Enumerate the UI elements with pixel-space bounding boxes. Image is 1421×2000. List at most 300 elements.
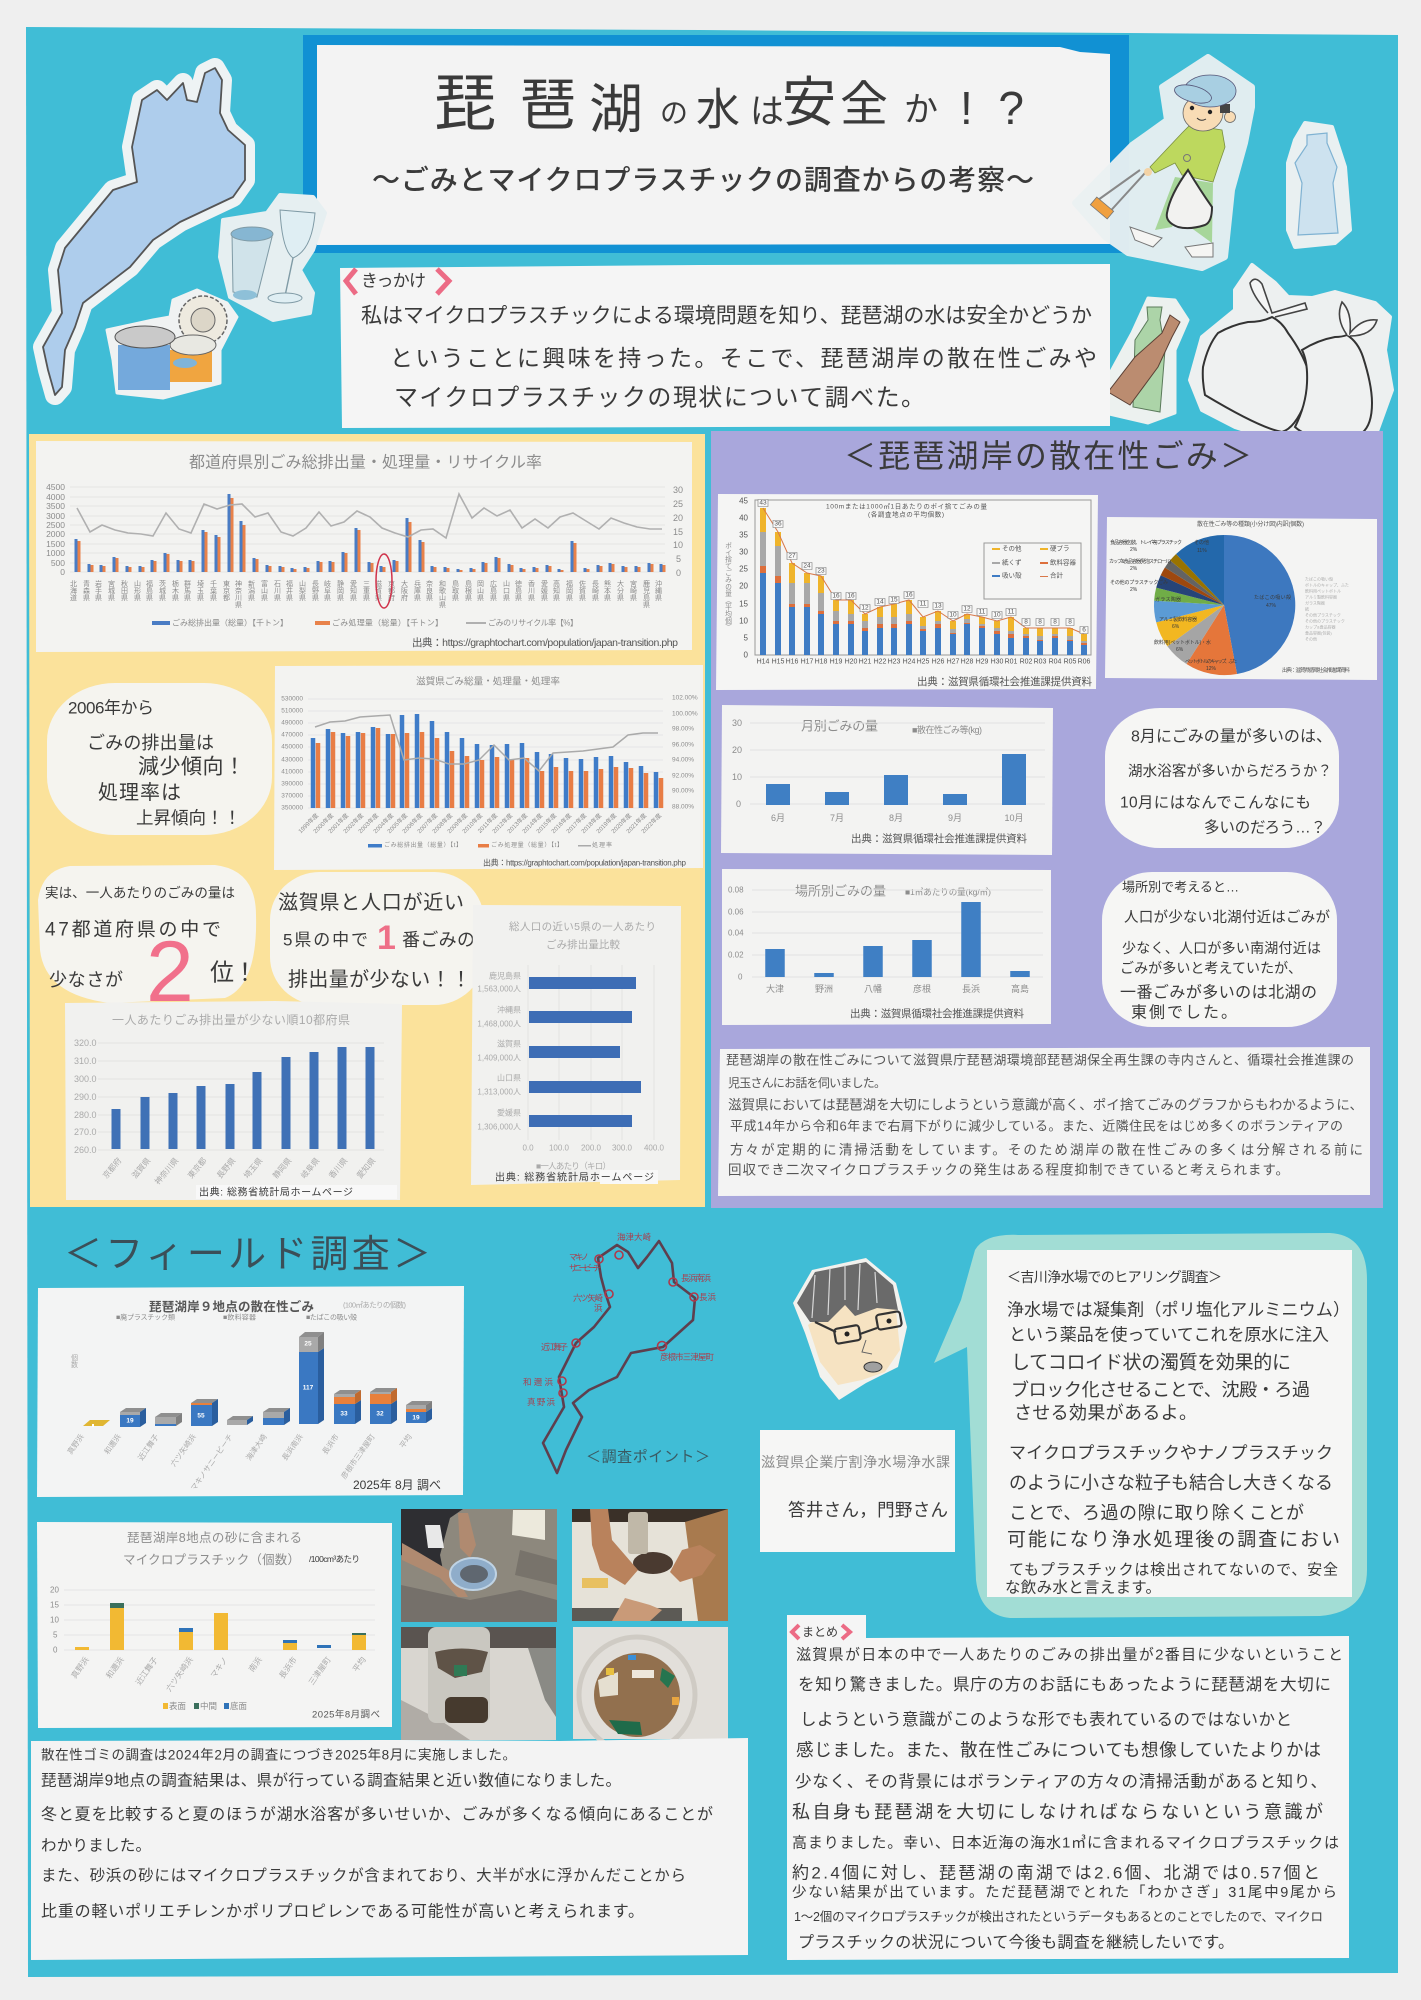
speech bubble: water plant hearing: てもプラスチックは検出されてないので、安全 bbox=[1009, 1562, 1338, 1578]
chart: litter per year stacked bars: H28 bbox=[961, 658, 974, 666]
text block: prefecture interview bbox=[718, 1047, 1370, 1196]
chart: litter per year stacked bars: H21 bbox=[859, 658, 872, 666]
chart: five prefectures of similar population: 総人口の近い5県の一人あたり bbox=[509, 920, 656, 933]
site labels: 六ツ矢崎 bbox=[573, 1293, 603, 1303]
text block: field survey results: 冬と夏を比較すると夏のほうが湖水浴客が多いせいか、ごみが多くなる傾向にあることが bbox=[41, 1806, 713, 1824]
chart: litter at nine sites: 平均 bbox=[397, 1431, 414, 1450]
illustration: person picking up litter bbox=[1075, 57, 1252, 268]
main title: !? bbox=[960, 82, 1024, 134]
chart: waste by prefecture: 茨城県 bbox=[158, 579, 166, 602]
chart: waste by prefecture: 0 bbox=[60, 567, 65, 577]
chart: waste by prefecture: 兵庫県 bbox=[414, 579, 421, 602]
chart: microplastics in sand: 南浜 bbox=[246, 1655, 264, 1674]
chart: litter by location: 大津 bbox=[766, 983, 784, 994]
chart: waste by prefecture: 熊本県 bbox=[604, 579, 611, 602]
bubble: why August and October: 10月にはなんでこんなにも bbox=[1120, 794, 1311, 812]
chart: litter by location: 彦根 bbox=[913, 983, 931, 994]
chart: litter per year stacked bars: H22 bbox=[874, 658, 887, 666]
chart: ten lowest prefectures per person: 愛知県 bbox=[354, 1155, 377, 1180]
chart: litter type pie: 2% bbox=[1130, 566, 1138, 572]
chart: litter per year stacked bars: 25 bbox=[739, 564, 749, 574]
chart: litter per year stacked bars: H14 bbox=[757, 658, 770, 666]
chart: Shiga waste totals and processing rate: 2012年度 bbox=[491, 811, 514, 835]
total value labels: 24 bbox=[803, 562, 811, 570]
chart: litter type pie: たばこの吸い殻 bbox=[1305, 576, 1333, 582]
chart: five prefectures of similar population bbox=[471, 905, 681, 1185]
chart: Shiga waste totals and processing rate: 350000 bbox=[281, 804, 303, 812]
chart: Shiga waste totals and processing rate: 2001年度 bbox=[327, 811, 350, 835]
chart: microplastics in sand: 琵琶湖岸8地点の砂に含まれる bbox=[127, 1530, 302, 1545]
chart: waste by prefecture: 2000 bbox=[46, 529, 65, 539]
speech bubble: water plant hearing: な飲み水と言えます。 bbox=[1005, 1578, 1161, 1596]
bubble: lowest of 5 similar prefectures: 滋賀県と人口が近い bbox=[278, 891, 464, 914]
chart: litter type pie: 紙 bbox=[1305, 606, 1309, 612]
bubble: thoughts by location: ごみが多いと考えていたが、 bbox=[1120, 960, 1302, 976]
chart: five prefectures of similar population: 1,306,000人 bbox=[477, 1122, 521, 1132]
chart: waste by prefecture: 福井県 bbox=[286, 579, 293, 602]
chart: five prefectures of similar population: 1,563,000人 bbox=[477, 984, 521, 994]
chart: litter type pie: 飲料用ペットボトル bbox=[1305, 588, 1341, 594]
chart: waste by prefecture: 20 bbox=[673, 513, 683, 523]
chart: Shiga waste totals and processing rate: 2011年度 bbox=[476, 811, 499, 835]
chart: five prefectures of similar population: 100.0 bbox=[549, 1144, 570, 1152]
total value labels: 15 bbox=[890, 596, 898, 604]
text block: prefecture interview: 琵琶湖岸の散在性ごみについて滋賀県庁琵琶湖環境部琵琶湖保全再生課の寺内さんと、循環社会推進課の bbox=[726, 1052, 1354, 1068]
speech bubble: water plant hearing: 浄水場では凝集剤（ポリ塩化アルミニウム） bbox=[1007, 1300, 1350, 1320]
chart: litter per year stacked bars: 20 bbox=[739, 582, 749, 590]
chart: waste by prefecture: 島根県 bbox=[464, 579, 472, 602]
total value labels: 8 bbox=[1038, 618, 1042, 626]
bubble: why August and October bbox=[1105, 708, 1339, 848]
chart: waste by prefecture: 三重県 bbox=[362, 580, 370, 602]
title banner bbox=[303, 35, 1129, 253]
legend: 合計 bbox=[1050, 570, 1064, 580]
chart: Shiga waste totals and processing rate: 1999年度 bbox=[297, 811, 320, 835]
chart: Shiga waste totals and processing rate bbox=[274, 665, 703, 870]
chart: Shiga waste totals and processing rate: 2018年度 bbox=[580, 811, 603, 835]
chart: waste by prefecture: 3000 bbox=[46, 511, 65, 521]
chart: waste by prefecture: 滋賀県 bbox=[374, 579, 382, 602]
chart: litter per year stacked bars: R03 bbox=[1034, 658, 1047, 666]
text block: field survey results: わかりました。 bbox=[41, 1836, 151, 1854]
chart: waste by prefecture: 500 bbox=[51, 558, 65, 568]
chart: Shiga waste totals and processing rate: 470000 bbox=[281, 732, 303, 738]
map caption: ＜調査ポイント＞ bbox=[586, 1448, 710, 1466]
chart: waste by prefecture: 奈良県 bbox=[426, 579, 433, 602]
chart: litter type pie: ガラス陶器 bbox=[1155, 596, 1181, 603]
chart: litter per year stacked bars bbox=[716, 494, 1098, 690]
chart: waste by prefecture: 千葉県 bbox=[210, 579, 217, 602]
chart: waste by prefecture: 0 bbox=[676, 568, 681, 578]
bubble: thoughts by location: 人口が少ない北湖付近はごみが bbox=[1124, 909, 1330, 926]
chart: waste by prefecture: 大阪府 bbox=[400, 579, 408, 602]
tag: kikkake: きっかけ bbox=[361, 272, 426, 290]
chart: litter at nine sites: 琵琶湖岸９地点の散在性ごみ bbox=[149, 1299, 314, 1314]
speech bubble: water plant hearing: ブロック化させることで、沈殿・ろ過 bbox=[1011, 1379, 1310, 1400]
heading: ＜琵琶湖岸の散在性ごみ＞ bbox=[844, 438, 1252, 474]
chart: Shiga waste totals and processing rate: 100.00% bbox=[672, 710, 698, 718]
speech bubble: water plant hearing: してコロイド状の濁質を効果的に bbox=[1011, 1352, 1291, 1374]
chart: litter by location: 出典：滋賀県循環社会推進課提供資料 bbox=[850, 1007, 1024, 1020]
body text: 少なく、その背景にはボランティアの方々の清掃活動があると知り、 bbox=[795, 1772, 1327, 1791]
chart: monthly litter: 出典：滋賀県循環社会推進課提供資料 bbox=[851, 832, 1028, 845]
chart: waste by prefecture: 福島県 bbox=[146, 579, 153, 602]
chart: waste by prefecture: 徳島県 bbox=[514, 579, 522, 602]
legend: ごみ総排出量（総量）【t】 bbox=[384, 841, 462, 849]
site labels: 真野浜 bbox=[527, 1397, 555, 1407]
big pink numeral 2: 2 bbox=[146, 924, 194, 1020]
chart: litter type pie: その他 bbox=[1305, 636, 1317, 642]
legend bbox=[984, 543, 1081, 599]
chart: Shiga waste totals and processing rate: 370000 bbox=[281, 792, 303, 800]
chart: litter type pie: その他プラスチック bbox=[1305, 612, 1341, 618]
chart: Shiga waste totals and processing rate: 2009年度 bbox=[446, 811, 469, 835]
chart: litter by location: 場所別ごみの量 bbox=[795, 884, 886, 898]
chart: monthly litter: 7月 bbox=[830, 813, 844, 823]
main title: 安 bbox=[782, 73, 836, 133]
chart: litter per year stacked bars: H20 bbox=[845, 658, 858, 666]
text block: field survey results: また、砂浜の砂にはマイクロプラスチックが含まれており、大半が水に浮かんだことから bbox=[41, 1866, 686, 1884]
map: survey points bbox=[523, 1232, 716, 1473]
total value labels: 11 bbox=[979, 608, 986, 616]
chart: waste by prefecture: 長崎県 bbox=[592, 580, 599, 602]
speech bubble: water plant hearing: 可能になり浄水処理後の調査におい bbox=[1007, 1528, 1340, 1550]
chart: waste by prefecture: 岡山県 bbox=[476, 580, 484, 602]
bubble: thoughts by location bbox=[1102, 872, 1337, 1027]
chart: litter by location: 0.04 bbox=[728, 928, 744, 938]
chart: Shiga waste totals and processing rate: 2003年度 bbox=[357, 811, 380, 835]
chart: Shiga waste totals and processing rate: 2015年度 bbox=[535, 811, 558, 835]
total value labels: 8 bbox=[1053, 618, 1057, 626]
chart: ten lowest prefectures per person: 長野県 bbox=[215, 1156, 237, 1180]
tag: kikkake bbox=[346, 269, 449, 294]
chart: monthly litter: 20 bbox=[732, 745, 742, 755]
chart: ten lowest prefectures per person: 神奈川県 bbox=[152, 1155, 180, 1186]
chart: microplastics in sand: 5 bbox=[53, 1630, 58, 1640]
chart: Shiga waste totals and processing rate: 450000 bbox=[281, 744, 303, 750]
chart: microplastics in sand: 平均 bbox=[350, 1655, 368, 1674]
chart: ten lowest prefectures per person: 290.0 bbox=[74, 1092, 97, 1102]
chart: waste by prefecture: 埼玉県 bbox=[196, 579, 204, 602]
chart: litter per year stacked bars: H24 bbox=[903, 658, 916, 666]
total value labels: 8 bbox=[1068, 618, 1072, 626]
chart: ten lowest prefectures per person: 310.0 bbox=[74, 1056, 97, 1066]
subtitle: 〜ごみとマイクロプラスチックの調査からの考察〜 bbox=[372, 164, 1034, 196]
chart: litter per year stacked bars: H26 bbox=[932, 658, 945, 666]
bubble: second lowest per person: 47都道府県の中で bbox=[45, 918, 221, 940]
chart: litter at nine sites: 117 bbox=[303, 1384, 314, 1392]
total value labels: 11 bbox=[920, 600, 927, 608]
chart: Shiga waste totals and processing rate: 滋賀県ごみ総量・処理量・処理率 bbox=[416, 676, 560, 688]
chart: Shiga waste totals and processing rate: 88.00% bbox=[672, 804, 694, 810]
chart: Shiga waste totals and processing rate: 2022年度 bbox=[640, 811, 663, 835]
chart: litter type pie: アルミ製飲料容器 bbox=[1305, 594, 1337, 600]
total value labels: 11 bbox=[1008, 608, 1015, 616]
chart: litter per year stacked bars: (各調査地点の平均個数) bbox=[868, 510, 944, 518]
site labels: 近江舞子 bbox=[541, 1342, 568, 1352]
chart: litter per year stacked bars: H17 bbox=[801, 658, 814, 666]
chart: litter per year stacked bars: 30 bbox=[739, 548, 749, 556]
chart: microplastics in sand bbox=[37, 1522, 392, 1728]
chart: litter at nine sites: 個数 bbox=[70, 1353, 78, 1369]
chart: waste by prefecture: 鹿児島県 bbox=[642, 579, 650, 609]
main title: は bbox=[750, 93, 784, 131]
chart: ten lowest prefectures per person: 静岡県 bbox=[270, 1155, 293, 1180]
bubble: waste trend since 2006: 処理率は bbox=[98, 781, 181, 804]
bubble: lowest of 5 similar prefectures bbox=[270, 872, 484, 1005]
chart: litter per year stacked bars: R04 bbox=[1049, 658, 1062, 666]
bubble: why August and October: 湖水浴客が多いからだろうか？ bbox=[1128, 762, 1332, 780]
chart: waste by prefecture: 秋田県 bbox=[120, 579, 128, 602]
chart: five prefectures of similar population: 山口県 bbox=[497, 1074, 521, 1082]
chart: waste by prefecture: 山梨県 bbox=[298, 580, 306, 602]
chart: waste by prefecture: 長野県 bbox=[312, 580, 319, 602]
chart: litter at nine sites: 長浜南浜 bbox=[279, 1431, 305, 1462]
main title: 水 bbox=[696, 86, 740, 134]
chart: litter per year stacked bars: 35 bbox=[739, 530, 749, 540]
chart: litter by location: 0 bbox=[738, 972, 743, 982]
total value labels: 12 bbox=[963, 606, 971, 612]
chart: Shiga waste totals and processing rate: 2000年度 bbox=[312, 811, 335, 835]
chart: Shiga waste totals and processing rate: 2007年度 bbox=[416, 811, 439, 835]
chart: litter at nine sites: マキノサニービーチ bbox=[189, 1432, 235, 1492]
site labels: 浜 bbox=[594, 1303, 603, 1313]
chart: five prefectures of similar population: 400.0 bbox=[644, 1144, 665, 1152]
chart: litter type pie: 6% bbox=[1172, 624, 1180, 630]
chart: litter per year stacked bars: 100mまたは1000㎡1日あたりのポイ捨てごみの量 bbox=[826, 502, 988, 510]
total value labels: 36 bbox=[774, 520, 782, 528]
card: staff names bbox=[760, 1430, 955, 1552]
chart: litter per year stacked bars: 5 bbox=[744, 634, 749, 642]
bubble: why August and October: 8月にごみの量が多いのは、 bbox=[1131, 728, 1332, 746]
body text: 滋賀県が日本の中で一人あたりのごみの排出量が2番目に少ないということ bbox=[796, 1646, 1343, 1664]
chart: litter type pie: ガラス陶器 bbox=[1305, 600, 1325, 606]
chart: five prefectures of similar population: 沖縄県 bbox=[497, 1004, 521, 1014]
chart: litter per year stacked bars: H27 bbox=[947, 658, 960, 666]
bubble: second lowest per person: 位！ bbox=[210, 960, 257, 986]
chart: waste by prefecture: 4500 bbox=[46, 482, 65, 492]
bubble: waste trend since 2006: 減少傾向！ bbox=[138, 756, 245, 778]
speech bubble: water plant hearing: ＜吉川浄水場でのヒアリング調査＞ bbox=[1007, 1269, 1222, 1285]
main title: 湖 bbox=[589, 80, 643, 140]
chart: litter type pie: 飲料用(ペットボトル)・水 bbox=[1154, 639, 1211, 646]
chart: microplastics in sand: マイクロプラスチック（個数） bbox=[123, 1552, 300, 1567]
chart: litter by location: 0.08 bbox=[728, 886, 744, 894]
bubble: waste trend since 2006: 上昇傾向！！ bbox=[136, 808, 241, 828]
chart: Shiga waste totals and processing rate: 390000 bbox=[281, 780, 303, 788]
chart: monthly litter: ■散在性ごみ等(kg) bbox=[912, 724, 982, 735]
chart: litter type pie: 散在性ごみ等の種類(小分け図)内訳(個数) bbox=[1197, 520, 1304, 528]
chart: waste by prefecture: 北海道 bbox=[70, 580, 77, 602]
chart: litter at nine sites: 真野浜 bbox=[65, 1431, 86, 1456]
chart: five prefectures of similar population: 300.0 bbox=[612, 1144, 633, 1152]
text block: field survey results: 比重の軽いポリエチレンかポリプロピレンである可能性が高いと考えられます。 bbox=[41, 1902, 644, 1920]
illustration: garbage bags bbox=[1190, 265, 1392, 445]
chart: litter per year stacked bars: 45 bbox=[739, 496, 749, 506]
text block: field survey results: 散在性ゴミの調査は2024年2月の調査につづき2025年8月に実施しました。 bbox=[41, 1746, 516, 1762]
chart: Shiga waste totals and processing rate: 490000 bbox=[281, 720, 303, 726]
chart: Shiga waste totals and processing rate: 510000 bbox=[281, 708, 303, 714]
chart: ten lowest prefectures per person: 滋賀県 bbox=[129, 1155, 152, 1180]
chart: waste by prefecture: 3500 bbox=[46, 501, 65, 511]
chart: microplastics in sand: 20 bbox=[50, 1586, 59, 1594]
bubble: lowest of 5 similar prefectures: 1 bbox=[377, 919, 396, 957]
site labels: 長浜 bbox=[699, 1292, 716, 1302]
total value labels: 14 bbox=[876, 598, 884, 606]
chart: litter at nine sites: 55 bbox=[197, 1412, 205, 1420]
chart: litter per year stacked bars: 出典：滋賀県循環社会推進課提供資料 bbox=[917, 675, 1092, 688]
chart: litter type pie: 12% bbox=[1206, 666, 1217, 672]
chart: waste by prefecture: 10 bbox=[673, 540, 683, 550]
chart: litter at nine sites: 六ツ矢崎浜 bbox=[168, 1431, 198, 1468]
chart: waste by prefecture bbox=[36, 441, 692, 652]
text block: prefecture interview: 方々が定期的に清掃活動をしています。そのため湖岸の散在性ごみの多くは分解される前に bbox=[730, 1142, 1363, 1158]
chart: litter per year stacked bars: H19 bbox=[830, 658, 843, 666]
chart: microplastics in sand: 六ツ矢崎浜 bbox=[164, 1655, 195, 1693]
chart: litter per year stacked bars: R05 bbox=[1064, 658, 1077, 666]
chart: litter type pie: その他 bbox=[1194, 539, 1209, 546]
chart: litter per year stacked bars: H25 bbox=[917, 658, 930, 666]
chart: microplastics in sand: 長浜市 bbox=[277, 1655, 299, 1680]
bubble: why August and October: 多いのだろう…？ bbox=[1204, 818, 1326, 836]
chart: waste by prefecture: 愛知県 bbox=[350, 579, 357, 602]
chart: ten lowest prefectures per person: 260.0 bbox=[74, 1145, 97, 1155]
photo: jar with floating particles bbox=[401, 1627, 556, 1740]
chart: litter type pie: 2% bbox=[1130, 547, 1138, 553]
chart: waste by prefecture: 新潟県 bbox=[248, 579, 255, 602]
chart: monthly litter bbox=[721, 705, 1053, 855]
body text: 感じました。また、散在性ごみについても想像していたよりかは bbox=[796, 1740, 1321, 1760]
chart: five prefectures of similar population: 0.0 bbox=[522, 1144, 534, 1152]
main title: の bbox=[660, 98, 688, 128]
speech bubble: water plant hearing: という薬品を使っていてこれを原水に注入 bbox=[1009, 1324, 1329, 1344]
total value labels: 27 bbox=[788, 552, 796, 560]
chart: waste by prefecture: 京都府 bbox=[388, 580, 395, 602]
bubble: lowest of 5 similar prefectures: 5県の中で bbox=[283, 930, 368, 950]
legend bbox=[163, 1701, 248, 1711]
chart: litter at nine sites: 19 bbox=[126, 1418, 134, 1424]
chart: ten lowest prefectures per person: 埼玉県 bbox=[241, 1155, 264, 1180]
chart: Shiga waste totals and processing rate: 2006年度 bbox=[401, 811, 424, 835]
total value labels: 43 bbox=[759, 500, 767, 506]
chart: litter type pie: ボトルのキャップ、ふた bbox=[1305, 582, 1349, 588]
chart: litter at nine sites: (100㎡あたりの個数) bbox=[343, 1300, 406, 1310]
body text: ということに興味を持った。そこで、琵琶湖岸の散在性ごみや bbox=[390, 345, 1097, 371]
chart: Shiga waste totals and processing rate: 530000 bbox=[281, 696, 303, 702]
legend: その他 bbox=[1002, 544, 1022, 552]
chart: litter at nine sites: ■たばこの吸い殻 bbox=[306, 1312, 357, 1322]
chart: litter by location: 0.06 bbox=[728, 908, 744, 916]
chart: waste by prefecture: 大分県 bbox=[616, 579, 624, 602]
chart: Shiga waste totals and processing rate: 92.00% bbox=[672, 772, 694, 780]
chart: Shiga waste totals and processing rate: 410000 bbox=[281, 768, 303, 776]
chart: five prefectures of similar population: 滋賀県 bbox=[497, 1038, 521, 1048]
chart: litter per year stacked bars: R02 bbox=[1020, 658, 1033, 666]
bubble: waste trend since 2006 bbox=[47, 683, 272, 835]
chart: Shiga waste totals and processing rate: 94.00% bbox=[672, 756, 694, 764]
chart: waste by prefecture: 神奈川県 bbox=[234, 579, 242, 609]
chart: monthly litter: 8月 bbox=[889, 813, 903, 823]
chart: litter type pie: 食品容器(包装) bbox=[1305, 630, 1332, 636]
total value labels bbox=[758, 500, 1088, 634]
chart: waste by prefecture: 出典：https://graphtochart.com/population/japan-transition.php bbox=[412, 636, 678, 649]
body text: 1〜2個のマイクロプラスチックが検出されたというデータもあるとのことでしたので、マイクロ bbox=[794, 1909, 1323, 1924]
chart: litter by location: 野洲 bbox=[815, 984, 833, 994]
marker: Shiga circle bbox=[376, 554, 392, 608]
source: 出典: 総務省統計局ホームページ bbox=[199, 1186, 353, 1198]
chart: waste by prefecture: 岐阜県 bbox=[324, 579, 331, 602]
chart: ten lowest prefectures per person: 京都府 bbox=[101, 1156, 123, 1180]
chart: ten lowest prefectures per person bbox=[65, 1001, 402, 1200]
chart: ten lowest prefectures per person: 一人あたりごみ排出量が少ない順10都府県 bbox=[112, 1012, 350, 1027]
legend: 処理率 bbox=[592, 841, 612, 849]
source bbox=[196, 1185, 397, 1199]
body text: 高まりました。幸い、日本近海の海水1㎥に含まれるマイクロプラスチックは bbox=[792, 1834, 1339, 1852]
chart: waste by prefecture: 高知県 bbox=[552, 579, 560, 602]
bubble: second lowest per person bbox=[38, 865, 257, 1020]
chart: waste by prefecture: 宮城県 bbox=[108, 579, 115, 602]
illustration: glass bottles bbox=[1097, 298, 1188, 423]
site labels: サニービーチ bbox=[569, 1263, 601, 1273]
chart: litter per year stacked bars: H30 bbox=[991, 658, 1004, 666]
total value labels: 10 bbox=[993, 612, 1001, 618]
total value labels: 12 bbox=[861, 604, 869, 612]
body text: しようという意識がこのような形でも表れているのではないかと bbox=[800, 1710, 1292, 1729]
legend: ごみ処理量（総量）【千トン】 bbox=[332, 618, 443, 628]
chart: litter type pie: カップ&食品容器(発泡スチロール) bbox=[1109, 558, 1171, 565]
body text: 私自身も琵琶湖を大切にしなければならないという意識が bbox=[792, 1802, 1323, 1822]
chart: litter type pie: ペットボトルのキャップ、ふた bbox=[1185, 658, 1237, 665]
chart: microplastics in sand: /100cm³あたり bbox=[309, 1554, 360, 1564]
illustration: Lake Biwa bbox=[43, 68, 245, 395]
chart: ten lowest prefectures per person: 東京都 bbox=[185, 1155, 208, 1180]
total value labels: 23 bbox=[817, 568, 825, 574]
chart: microplastics in sand: 三津屋町 bbox=[306, 1655, 333, 1687]
chart: waste by prefecture: 東京都 bbox=[222, 579, 230, 602]
legend: ごみのリサイクル率【%】 bbox=[488, 618, 578, 628]
chart: microplastics in sand: 和邇浜 bbox=[104, 1655, 126, 1680]
chart: litter at nine sites: 長浜市 bbox=[320, 1431, 341, 1456]
chart: waste by prefecture: 4000 bbox=[46, 492, 65, 502]
chart: litter at nine sites: 32 bbox=[376, 1410, 384, 1418]
chart: litter type pie: 食品容器(包装、トレイ等)プラスチック bbox=[1110, 539, 1182, 546]
chart: microplastics in sand: 0 bbox=[53, 1646, 58, 1654]
speech bubble: water plant hearing bbox=[934, 1233, 1367, 1618]
chart: waste by prefecture: 都道府県別ごみ総排出量・処理量・リサイクル率 bbox=[189, 454, 542, 472]
chart: Shiga waste totals and processing rate: 2016年度 bbox=[550, 811, 573, 835]
speech bubble: water plant hearing: ことで、ろ過の隙に取り除くことが bbox=[1009, 1503, 1304, 1523]
bubble: thoughts by location: 場所別で考えると… bbox=[1122, 880, 1239, 894]
chart: litter per year stacked bars: ポイ捨てごみの量（平均個） bbox=[724, 542, 732, 630]
chart: waste by prefecture: 和歌山県 bbox=[438, 579, 446, 609]
text block: prefecture interview: 平成14年から令和6年まで右肩下がりに減少している。また、近隣住民をはじめ多くのボランティアの bbox=[730, 1118, 1343, 1134]
chart: Shiga waste totals and processing rate: 2008年度 bbox=[431, 811, 454, 835]
chart: litter type pie: カップ&食品容器 bbox=[1305, 624, 1336, 630]
chart: Shiga waste totals and processing rate: 2002年度 bbox=[342, 811, 365, 835]
chart: monthly litter: 9月 bbox=[948, 813, 962, 823]
chart: ten lowest prefectures per person: 岐阜県 bbox=[298, 1155, 321, 1180]
chart: Shiga waste totals and processing rate: 2004年度 bbox=[372, 811, 395, 835]
tag: matome: まとめ bbox=[802, 1625, 838, 1639]
chart: monthly litter: 6月 bbox=[771, 813, 785, 823]
chart: waste by prefecture: 25 bbox=[673, 499, 683, 509]
text block: prefecture interview: 児玉さんにお話を伺いました。 bbox=[728, 1076, 886, 1090]
body text: マイクロプラスチックの現状について調べた。 bbox=[394, 384, 925, 412]
chart: waste by prefecture: 香川県 bbox=[528, 579, 535, 602]
bubble: lowest of 5 similar prefectures: 排出量が少ない！！ bbox=[288, 968, 471, 991]
chart: monthly litter: 月別ごみの量 bbox=[801, 718, 878, 734]
total value labels: 16 bbox=[905, 592, 913, 598]
